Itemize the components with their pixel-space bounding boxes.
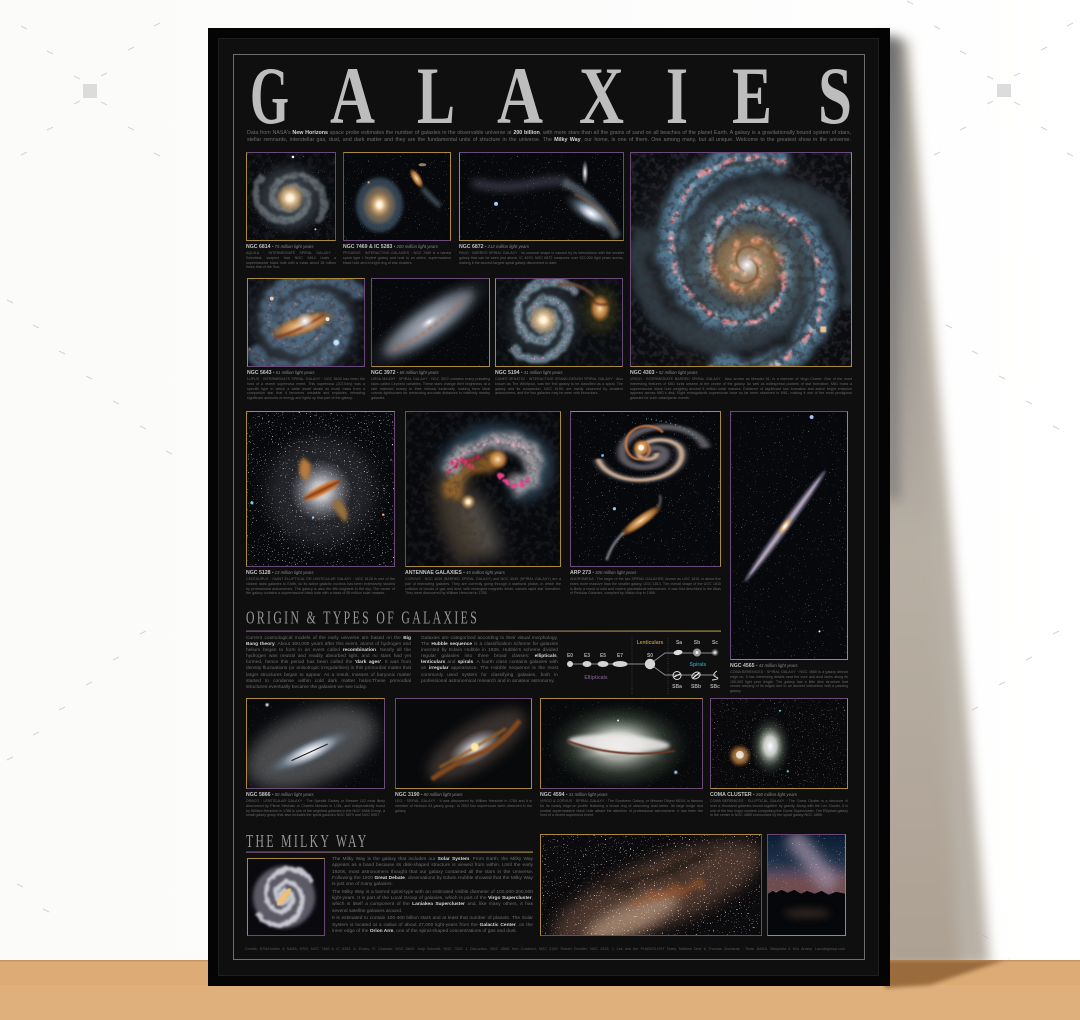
text: Milky Way description: The Milky Way is the galaxy that includes our Solar System. From Earth, the Milky Way appears as a band because its disk-shaped structure is viewed from within. Until the early 1920s, most astronomers thought that our galaxy contained all the stars in the Universe. Following the 1920 Great Debate, observations by Edwin Hubble showed that the Milky Way is just one of many galaxies. xyxy=(332,857,533,887)
panel: NGC 4594 xyxy=(540,698,703,817)
intro text: Data from NASA's New Horizons space probe estimates the number of galaxies in the observable universe at 200 billion, with more stars than all the grains of sand on all beaches of the planet Earth. A galaxy is a gravitationally bound system of stars, xyxy=(247,130,851,136)
image: Sombrero galaxy xyxy=(540,698,703,789)
caption: NGC 4565 • 43 million light years xyxy=(730,663,798,669)
Hubble labels: Sa xyxy=(676,640,682,646)
caption: ANTENNAE GALAXIES • 45 million light years xyxy=(405,570,505,576)
image: NGC 5643 barred spiral xyxy=(247,278,365,367)
chart: Hubble sequence xyxy=(567,638,720,694)
panel: NGC 6814 xyxy=(246,152,336,269)
inner border line xyxy=(233,54,865,960)
Hubble labels: E0 xyxy=(567,653,573,659)
image: Coma Cluster xyxy=(710,698,848,789)
Hubble labels: S0 xyxy=(647,653,653,659)
intro text: stellar remnants, interstellar gas, dust, and dark matter and they are the fundamental units of structure in the universe. The Milky Way, our home, is one of them. One among many, but all unique. Welcome to the greatest show in the universe. xyxy=(247,137,851,143)
caption: CORVUS · NGC 4038 (BARRED SPIRAL GALAXY) and NGC 4039 (SPIRAL GALAXY) are a pair of interacting galaxies. They are currently going through a starburst phase, in which the collision of clouds of gas and dust, with entangled magnetic fields, causes rapid star formation. They were discovered by William Herschel in 1785. xyxy=(405,577,561,595)
image: Centaurus A xyxy=(246,411,395,567)
caption: NGC 4594 • 31 million light years xyxy=(540,792,608,798)
caption: CANES VENATICI · INTERACTING GRAND-DESIGN SPIRAL GALAXY · Also known as The Whirlpool, was the first galaxy to be classified as a spiral. The galaxy and its companion, NGC 5195, are easily observed by amateur astronomers, and the two galaxies may be seen with binoculars. xyxy=(495,377,623,395)
image: Antennae Galaxies xyxy=(405,411,561,567)
image: interacting galaxies xyxy=(343,152,451,241)
panel: NGC 6872 xyxy=(459,152,624,265)
panel: NGC 4303 xyxy=(630,152,852,400)
text: origin of galaxies: Current cosmological models of the early universe are based on the Big Bang theory. About 300,000 years after this event, atoms of hydrogen and helium began to form in an event called recombination. Nearly all the hydrogen was neutral and readily absorbed light, and no stars had yet formed, hence this period has been called the 'dark ages'. It was from density fluctuations (or anisotropic irregularities) in this primordial matter that larger structures began to appear. As a result, masses of baryonic matter started to condense within cold dark matter halos.These primordial structures eventually became the galaxies we see today. xyxy=(246,636,411,690)
caption xyxy=(343,244,451,265)
panel: NGC 5194 xyxy=(495,278,623,395)
image: Arp 273 rose galaxies xyxy=(570,411,721,567)
panel: NGC 5643 xyxy=(247,278,365,400)
caption xyxy=(459,244,624,265)
text: Milky Way description: The Milky Way is a barred spiral-type with an estimated visible diameter of 100,000-200,000 light-years. It is part of the Local Group of galaxies, which is part of the Virgo Supercluster, which is itself a component of the Laniakea Supercluster and, like many others, it has several satellite galaxies around. xyxy=(332,890,533,914)
caption: COMA BERENICES · SPIRAL GALAXY · NGC 4565 is a galaxy almost edge on. It has interesting details near the core and dust lanes along its 100,000 light year length. The galaxy has a little disk structure that shows warping of its edges due to an ancient interaction with a passing galaxy. xyxy=(730,670,848,693)
Hubble labels: Lenticulars xyxy=(637,640,664,646)
caption: VIRGO & CORVUS · SPIRAL GALAXY · The Sombrero Galaxy, or Messier Object M104, is famous for its nearly edge-on profile featuring a broad ring of obscuring dust lanes. Its large bulge and central supermassive black hole attract the attention of professional astronomers. It has been the host of a recent supernova event. xyxy=(540,799,703,817)
heading: the Milky Way: THE MILKY WAY xyxy=(246,832,366,852)
image: Whirlpool galaxy xyxy=(495,278,623,367)
credits: Credits: ESA/Hubble & NASA, ESO, NGC 7469 & IC 5283: A. Evans, R. Chandar, NGC 5643: Jody Schmidt, NGC 7329: J. DaLuzdon, NGC 4565: Ken Crawford, NGC 3190: Robert Gendler, NGC 4303: J. Lee and the PHANGS-HST Team, Mathew Dine & Thomas Cloutarak · Texts: NASA, Wikipedia & Kris Ardery. Lacodegshop.com xyxy=(245,947,845,951)
text: Milky Way description: It is estimated to contain 100-400 billion stars and at least that number of planets. The Solar System is located at a radius of about 27,000 light-years from the Galactic Center, on the inner edge of the Orion Arm, one of the spiral-shaped concentrations of gas and dust. xyxy=(332,916,533,934)
icon: wall watermark right xyxy=(997,84,1011,97)
image: NGC 6872 with tail xyxy=(459,152,624,241)
caption: AQUILA · INTERMEDIATE SPIRAL GALAXY · Scientists suspect that NGC 6814 hosts a supermassive black hole with a mass about 18 million times that of the Sun. xyxy=(246,251,336,269)
caption: NGC 6872 • 212 million light years xyxy=(459,244,529,250)
image: NGC 6814 spiral xyxy=(246,152,336,241)
panel: NGC 5128 xyxy=(246,411,395,595)
caption: NGC 5643 • 61 million light years xyxy=(247,370,315,376)
panel: NGC 7469 and IC 5283 xyxy=(343,152,451,265)
caption: NGC 7469 & IC 5283 • 200 million light years xyxy=(343,244,438,250)
Hubble labels: Sb xyxy=(694,640,700,646)
Hubble labels: E3 xyxy=(584,653,590,659)
wooden floor xyxy=(0,960,1080,1020)
caption: NGC 4303 • 52 million light years xyxy=(630,370,698,376)
caption: DRACO · LENTICULAR GALAXY · The Spindle Galaxy or Messier 102 most likely discovered by Pierre Méchain or Charles Messier in 1781, and independently found by William Herschel in 1788 is one of the brightest galaxies in the NGC 5866 Group, a small galaxy group that also includes the spiral galaxies NGC 5879 and NGC 5907. xyxy=(246,799,385,817)
image: NGC 3190 dusty spiral xyxy=(395,698,532,789)
intro text xyxy=(247,130,851,143)
caption: LUPUS · INTERMEDIATE SPIRAL GALAXY · NGC 5643 has been the host of a recent supernova event. This supernova (2017cbv) was a specific type in which a white dwarf steals as much mass from a companion star that it becomes unstable and explodes, releasing significant amounts of energy and lights up that part of the galaxy. xyxy=(247,377,365,400)
image: Milky Way over lake photograph xyxy=(767,834,846,936)
Hubble labels: SBa xyxy=(672,684,682,690)
caption: ARP 273 • 300 million light years xyxy=(570,570,636,576)
caption: NGC 3190 • 80 million light years xyxy=(395,792,463,798)
icon: wall watermark left xyxy=(83,84,97,98)
caption: NGC 3972 • 65 million light years xyxy=(371,370,439,376)
caption: COMA BERENICES · ELLIPTICAL GALAXY · The Coma Cluster is a structure of over a thousand galaxies bound together by gravity. Along with the Leo Cluster, it is one of the two major clusters comprising the Coma Supercluster. The Elliptical galaxy in the center is NGC 4889 surrounded by the spiral galaxy NGC 4858. xyxy=(710,799,848,817)
Hubble labels: Sc xyxy=(712,640,718,646)
caption: URSA MAJOR · SPIRAL GALAXY · NGC 3972 contains many pulsating stars called Cepheid variables. These stars change their brightness at a rate matched closely to their intrinsic luminosity, making them ideal cosmic lighthouses for measuring accurate distances to relatively nearby galaxies. xyxy=(371,377,490,400)
caption: CENTAURUS · GIANT ELLIPTICAL OR LENTICULAR GALAXY · NGC 5128 is one of the closest radio galaxies to Earth, so its active galactic nucleus has been extensively studied by professional astronomers. The galaxy is also the fifth-brightest in the sky. The center of the galaxy contains a supermassive black hole with a mass of 55 million solar masses. xyxy=(246,577,395,595)
caption: NGC 5194 • 31 million light years xyxy=(495,370,563,376)
panel: Coma Cluster xyxy=(710,698,848,817)
caption: NGC 6814 • 75 million light years xyxy=(246,244,314,250)
poster shadow on wall xyxy=(890,28,996,960)
image: NGC 4565 edge-on galaxy xyxy=(730,411,848,660)
caption xyxy=(395,792,532,813)
panel: NGC 5866 xyxy=(246,698,385,817)
panel: NGC 4565 xyxy=(730,411,848,693)
panel: NGC 3190 xyxy=(395,698,532,813)
poster frame xyxy=(208,28,890,986)
Hubble labels: Spirals xyxy=(690,662,707,668)
elliptical shapes xyxy=(567,659,655,669)
text: Milky Way description xyxy=(332,856,533,934)
panel: NGC 3972 xyxy=(371,278,490,400)
image: Milky Way core photograph xyxy=(540,834,762,936)
caption: LEO · SPIRAL GALAXY · It was discovered by William Herschel in 1784 and it is member of Hickson 44 galaxy group. In 2002 two supernovae were observed in the galaxy. xyxy=(395,799,532,812)
image: Milky Way illustration xyxy=(247,858,325,936)
Hubble labels: SBc xyxy=(710,684,720,690)
Hubble labels: E7 xyxy=(617,653,623,659)
Hubble labels: E5 xyxy=(600,653,606,659)
caption: PAVO · BARRED SPIRAL GALAXY · Its unusual shape is caused by its interactions with the smaller galaxy that can be seen just above, IC 4970. NGC 6872 measures over 522,000 light years across, making it the second largest spiral galaxy discovered to date. xyxy=(459,251,624,264)
text: types of galaxies: Galaxies are categorized according to their visual morphology. The Hubble sequence is a classification scheme for galaxies invented by Edwin Hubble in 1926. Hubble's scheme divided regular galaxies into three broad classes: ellipticals, lenticulars and spirals. A fourth class contains galaxies with an irregular appearance. The Hubble sequence is the most commonly used system for classifying galaxies, both in professional astronomical research and in amateur astronomy. xyxy=(421,636,558,684)
caption: ANDROMEDA · The larger of the two SPIRAL GALAXIES, known as UGC 1810, is about five times more massive than the smaller galaxy, UGC 1813. The overall shape of the UGC 1810 is likely a result of wild and violent gravitational interactions. It was first described in the Atlas of Peculiar Galaxies, compiled by Halton Arp in 1966. xyxy=(570,577,721,595)
image: Spindle galaxy xyxy=(246,698,385,789)
Hubble labels: Ellipticals xyxy=(584,675,608,681)
Hubble labels: SBb xyxy=(691,684,701,690)
image: NGC 3972 inclined spiral xyxy=(371,278,490,367)
caption: COMA CLUSTER • 260 million light years xyxy=(710,792,797,798)
Hubble labels xyxy=(567,640,720,690)
heading: origin and types: ORIGIN & TYPES OF GALAXIES xyxy=(246,608,477,628)
caption: NGC 5866 • 50 million light years xyxy=(246,792,314,798)
caption: VIRGO · INTERMEDIATE BARRED SPIRAL GALAXY · Also known as Messier 61, is a member of Virgo Cluster. One of the most interesting features of M61 lurks unseen at the centre of the galaxy. As well as widespread pockets of star formation, M61 hosts a supermassive black hole weighing around 5 million solar masses. Evidence of significant star formation and active bright emission appears across M61's disk. Eight extragalactic supernovae have so far been observed in M61, making it one of the most prodigious galaxies for such cataclysmic events. xyxy=(630,377,852,400)
spiral shapes xyxy=(673,648,719,680)
title xyxy=(250,60,852,130)
image: NGC 4303 large spiral xyxy=(630,152,852,367)
caption: NGC 5128 • 13 million light years xyxy=(246,570,314,576)
caption: PEGASUS · INTERACTING GALAXIES · NGC 7469 is a barred spiral type I Seyfert galaxy and host to an active, supermassive black hole and a bright ring of star clusters. xyxy=(343,251,451,264)
poster paper xyxy=(218,38,879,976)
panel: Antennae Galaxies xyxy=(405,411,561,595)
panel: Arp 273 xyxy=(570,411,721,595)
